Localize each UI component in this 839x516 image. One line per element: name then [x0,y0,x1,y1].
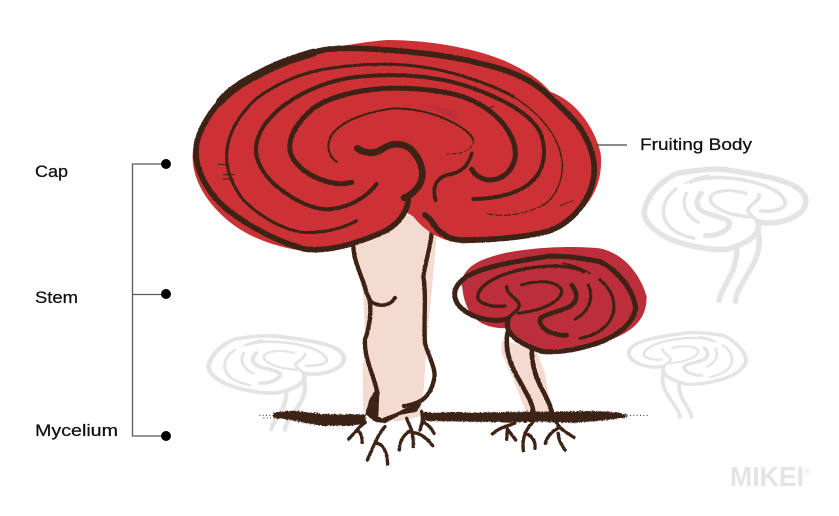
ground speckle [259,415,650,418]
dot: cap [161,159,171,169]
logo: MIKEI: ® [804,467,810,476]
ground [273,410,627,426]
large mushroom cap [193,40,601,252]
label: Mycelium: Mycelium [35,421,118,440]
small cap red shape [462,247,647,350]
roots [349,412,574,464]
label: Fruiting Body: Fruiting Body [640,135,753,154]
logo: MIKEI: MIKEI [730,461,804,492]
ghost mushroom: bottom right [629,332,746,417]
small stem fill [502,340,552,413]
cap ink rings [196,48,594,250]
bracket connector lines [132,164,166,436]
dot: mycelium [161,431,171,441]
dark patch in cap [422,104,457,119]
ghost mushroom: top right [644,169,806,301]
small mushroom ink lines [455,256,636,413]
label: Stem: Stem [35,288,78,307]
ground line and roots [259,410,650,464]
dot: stem [161,289,171,299]
large mushroom stem [353,210,437,423]
label: Cap: Cap [35,162,68,181]
fruiting body leader line [596,144,627,146]
cap red shape [193,40,601,252]
ghost mushroom: bottom left [208,336,344,430]
small mushroom [455,247,647,413]
